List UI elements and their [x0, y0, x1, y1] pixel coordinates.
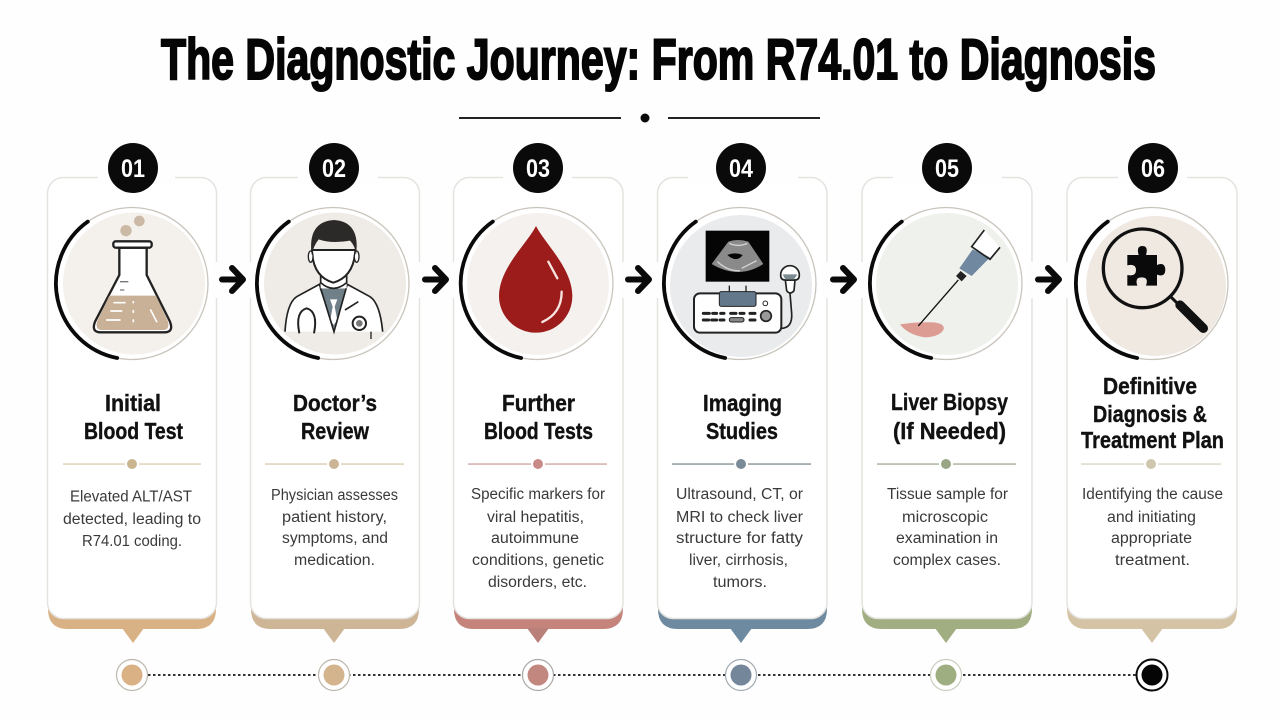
heading: Blood Tests	[484, 418, 593, 444]
description	[63, 488, 201, 550]
step number 05: 05	[935, 155, 959, 183]
panel: step 4 imaging studies	[653, 143, 832, 643]
timeline node 3	[522, 660, 554, 690]
step number 04: 04	[729, 155, 753, 183]
icon: doctor	[257, 208, 409, 360]
step number 04	[716, 143, 766, 193]
heading: (If Needed)	[893, 418, 1006, 444]
heading: Further	[502, 390, 575, 416]
description: medication.	[294, 552, 375, 569]
heading: Diagnosis &	[1093, 401, 1207, 427]
description: appropriate	[1111, 530, 1192, 547]
description	[1082, 486, 1223, 569]
heading	[891, 389, 1008, 444]
description: and initiating	[1107, 509, 1196, 526]
heading: Liver Biopsy	[891, 389, 1008, 415]
step number 02: 02	[322, 155, 346, 183]
heading: Doctor’s	[293, 390, 377, 416]
heading	[293, 390, 377, 444]
timeline node 1	[116, 660, 148, 690]
panel: step 2 doctor's review	[246, 143, 425, 643]
divider	[1081, 458, 1221, 470]
heading: Review	[301, 418, 370, 444]
icon: ultrasound machine	[664, 208, 816, 360]
divider	[877, 458, 1016, 470]
step number 06: 06	[1141, 155, 1165, 183]
icon: biopsy needle	[870, 208, 1022, 360]
description: patient history,	[282, 509, 387, 526]
step number 06	[1128, 143, 1178, 193]
description: Tissue sample for	[887, 486, 1008, 503]
description	[271, 487, 398, 569]
timeline node 5	[930, 660, 962, 690]
panel: step 6 definitive diagnosis and treatment plan	[1062, 143, 1237, 643]
heading	[84, 390, 183, 444]
step number 01: 01	[121, 155, 145, 183]
panel: step 5 liver biopsy	[857, 143, 1037, 643]
step number 03: 03	[526, 155, 550, 183]
description: Specific markers for	[471, 486, 605, 503]
heading: Initial	[105, 390, 161, 416]
description: MRI to check liver	[676, 509, 803, 526]
panel: step 1 initial blood test	[48, 143, 222, 643]
panel: step 3 further blood tests	[449, 143, 628, 643]
divider	[265, 458, 404, 470]
timeline node 4	[726, 660, 756, 690]
heading: Treatment Plan	[1081, 427, 1224, 453]
divider	[468, 458, 607, 470]
heading	[1081, 373, 1224, 453]
heading	[703, 390, 782, 444]
arrow 4 to 5	[833, 268, 854, 291]
description: examination in	[896, 530, 998, 547]
description: tumors.	[713, 574, 767, 591]
description: structure for fatty	[676, 530, 803, 547]
icon: blood drop	[461, 208, 613, 360]
description: Physician assesses	[271, 487, 398, 504]
description: Identifying the cause	[1082, 486, 1223, 503]
description: autoimmune	[491, 530, 579, 547]
step number 02	[309, 143, 359, 193]
step number 05	[922, 143, 972, 193]
description	[471, 486, 605, 591]
heading	[484, 390, 593, 444]
arrow 3 to 4	[628, 268, 649, 291]
description: treatment.	[1115, 552, 1190, 569]
divider	[672, 458, 811, 470]
heading: Blood Test	[84, 418, 183, 444]
description: disorders, etc.	[488, 574, 587, 591]
description: liver, cirrhosis,	[689, 552, 788, 569]
timeline node 2	[318, 660, 350, 690]
description: conditions, genetic	[472, 552, 604, 569]
timeline node 6	[1136, 660, 1168, 690]
divider	[63, 458, 201, 470]
step number 01	[108, 143, 158, 193]
icon: flask	[56, 208, 208, 360]
description	[887, 486, 1008, 569]
description: Ultrasound, CT, or	[676, 486, 803, 503]
heading: Studies	[706, 418, 778, 444]
heading: Imaging	[703, 390, 782, 416]
step number 03	[513, 143, 563, 193]
description: Elevated ALT/AST	[70, 488, 193, 506]
description: R74.01 coding.	[82, 533, 182, 550]
timeline dotted line	[148, 674, 1136, 676]
description: symptoms, and	[282, 530, 388, 547]
description: complex cases.	[893, 552, 1001, 569]
title divider	[459, 114, 820, 122]
description: viral hepatitis,	[487, 509, 584, 526]
heading: Definitive	[1103, 373, 1197, 399]
description	[676, 486, 803, 591]
arrow 1 to 2	[222, 268, 243, 291]
arrow 2 to 3	[425, 268, 446, 291]
description: microscopic	[902, 509, 988, 526]
arrow 5 to 6	[1038, 268, 1059, 291]
icon: magnifier with puzzle piece	[1076, 208, 1228, 360]
description: detected, leading to	[63, 511, 201, 528]
